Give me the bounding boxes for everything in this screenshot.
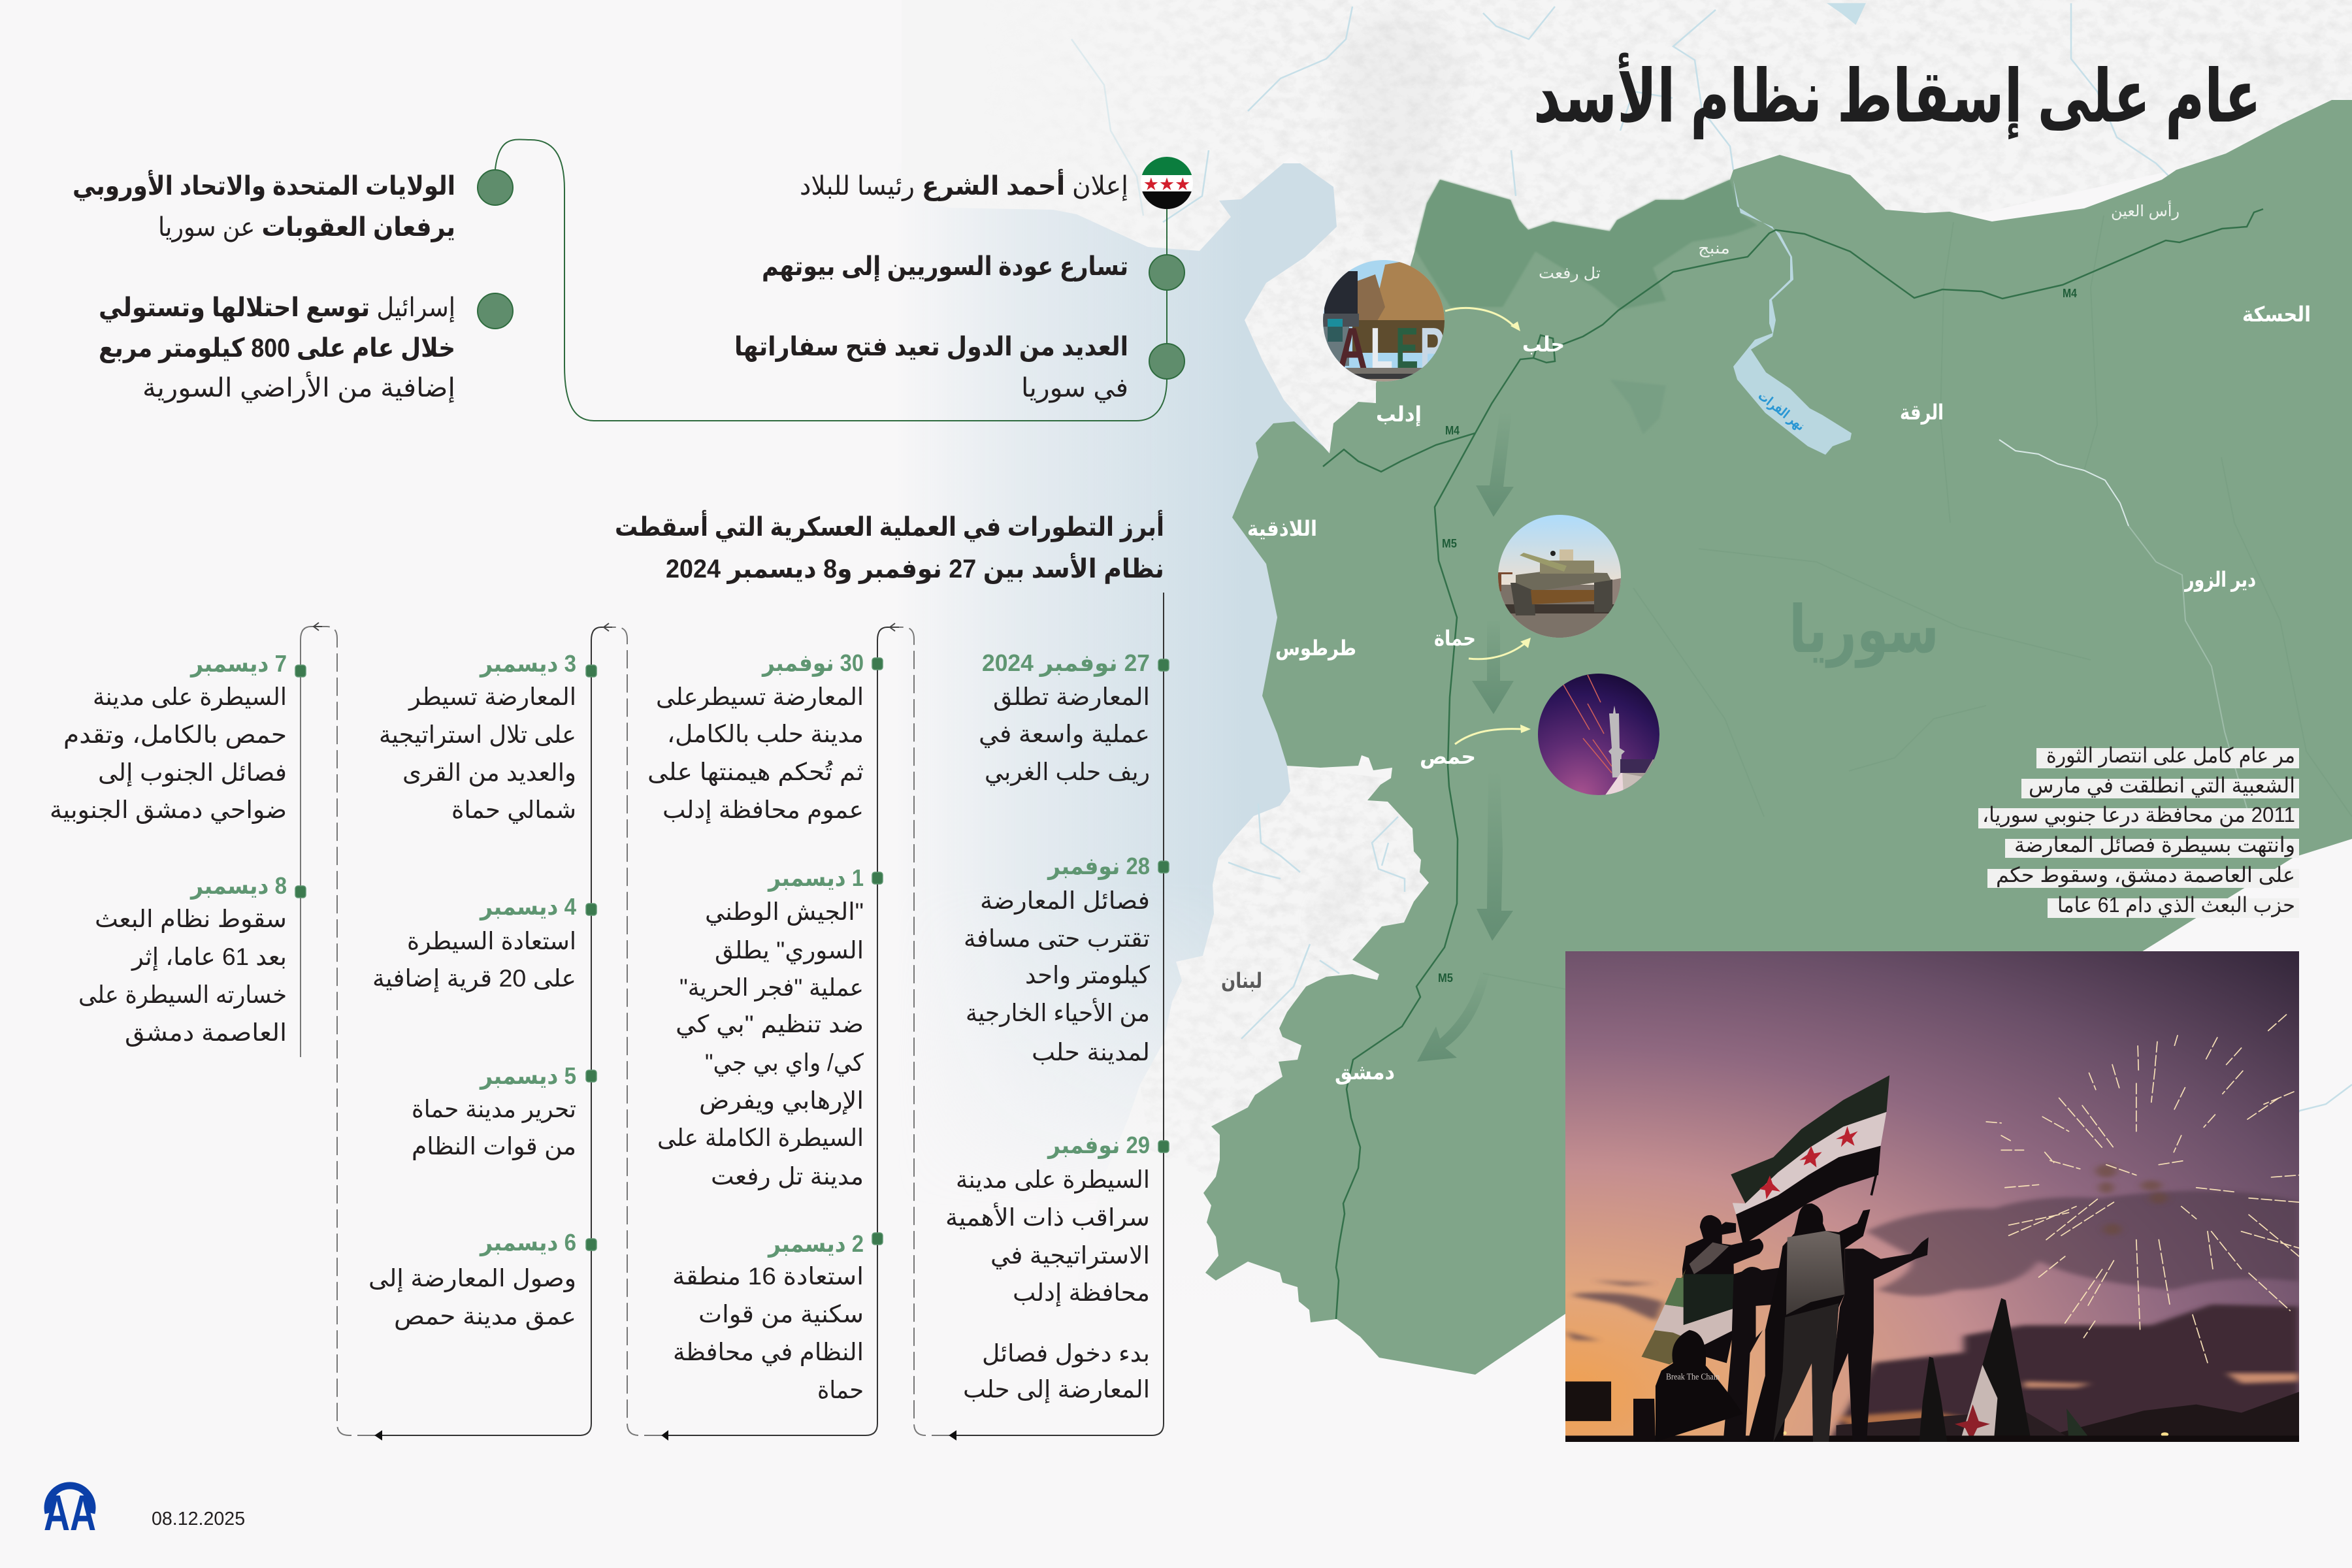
date 29 Nov: 29 نوفمبر: [1047, 1132, 1150, 1159]
entry 29 Nov: محافظة إدلب: [1013, 1279, 1150, 1307]
photo circle: Aleppo sign: E: [1396, 316, 1418, 380]
node 2: [1149, 255, 1184, 290]
entry 7 Dec: ضواحي دمشق الجنوبية: [50, 796, 287, 824]
node 5 Dec: [586, 1070, 596, 1082]
entry 30 Nov: عموم محافظة إدلب: [662, 796, 864, 824]
M4 west: M4: [1445, 424, 1460, 437]
entry 1 Dec: عملية "فجر الحرية": [679, 974, 864, 1002]
entry 30 Nov: [647, 683, 864, 824]
node 6 Dec: [586, 1239, 596, 1250]
summary lines: الشعبية التي انطلقت في مارس: [2029, 774, 2295, 798]
entry 2 Dec: استعادة 16 منطقة: [672, 1263, 864, 1290]
entry 4 Dec: [372, 928, 576, 992]
entry 29 Nov: سراقب ذات الأهمية: [945, 1202, 1150, 1232]
arrow Aleppo: [1445, 308, 1520, 331]
label: Deir ez-Zor: دير الزور: [2183, 568, 2256, 592]
lower river: [1999, 440, 2247, 810]
entry 3 Dec: شمالي حماة: [451, 796, 576, 824]
entry 4 Dec: على 20 قرية إضافية: [372, 965, 576, 992]
label: Tartus: طرطوس: [1275, 636, 1356, 661]
date 4 Dec: 4 ديسمبر: [479, 893, 576, 921]
entry 1 Dec: مدينة تل رفعت: [711, 1163, 864, 1190]
entry 3 Dec: والعديد من القرى: [402, 759, 576, 787]
logo letters: AA: [44, 1485, 96, 1541]
date 6 Dec: 6 ديسمبر: [479, 1229, 576, 1256]
node 30 Nov: [872, 658, 883, 670]
photo circle: tank: [1498, 515, 1621, 638]
entry 7 Dec: [50, 683, 287, 824]
rail 4 solid: [301, 627, 314, 1057]
node 4 Dec: [586, 904, 596, 915]
rail 1 dashed: [898, 627, 950, 1435]
northern darker zone: [1415, 180, 1757, 310]
timeline column 4: [50, 650, 287, 1047]
summary text block: [1978, 743, 2299, 918]
road labels: [1438, 287, 2077, 985]
entry 28 Nov: فصائل المعارضة: [980, 887, 1150, 915]
person with cape: [1641, 1215, 1763, 1364]
line 1: إسرائيل توسع احتلالها وتستولي: [99, 293, 455, 323]
M4 highway: [1323, 209, 2263, 472]
flag stripes: [1731, 1075, 1889, 1245]
entry 1 Dec: كي/ واي بي جي": [705, 1049, 864, 1077]
label: Aleppo: حلب: [1522, 333, 1565, 356]
heading line 2: نظام الأسد بين 27 نوفمبر و8 ديسمبر 2024: [666, 552, 1164, 584]
photo sky, clouds and fireworks: [1565, 951, 2299, 1442]
node 3: [1149, 344, 1184, 379]
event: sanctions: [73, 169, 455, 242]
entry 1 Dec: السوري" يطلق: [715, 937, 864, 964]
arrows: [314, 623, 899, 631]
logo arc: [48, 1486, 92, 1513]
AA logo: [44, 1485, 96, 1541]
timeline column 2: [647, 649, 864, 1403]
node 2 Dec: [872, 1233, 883, 1245]
event: Israel: [99, 293, 455, 403]
inner faint lines: [1483, 216, 2352, 1163]
entry 8 Dec: بعد 61 عاما، إثر: [131, 943, 287, 971]
entry 5 Dec: تحرير مدينة حماة: [412, 1096, 576, 1123]
line backgrounds: [1978, 748, 2299, 918]
entry 2 Dec: النظام في محافظة: [673, 1339, 864, 1366]
entry 7 Dec: حمص بالكامل، وتقدم: [63, 721, 287, 749]
entry 6 Dec: [368, 1265, 576, 1330]
top timeline connector: [495, 139, 1167, 421]
date 30 Nov: 30 نوفمبر: [761, 649, 864, 677]
line 2: خلال عام على 800 كيلومتر مربع: [99, 334, 455, 363]
summary lines: 2011 من محافظة درعا جنوبي سوريا،: [1982, 803, 2295, 827]
entry 1 Dec: "الجيش الوطني: [705, 898, 864, 926]
entry 5 Dec: [412, 1096, 576, 1160]
line 1: العديد من الدول تعيد فتح سفاراتها: [734, 333, 1128, 362]
photo circle: Aleppo sign: L: [1370, 316, 1393, 380]
advance arrow 1: [1476, 412, 1514, 517]
label: Lebanon: لبنان: [1221, 969, 1262, 992]
entry 1 Dec: السيطرة الكاملة على: [657, 1124, 864, 1152]
entry entering Aleppo: [963, 1340, 1150, 1403]
entry entering Aleppo: المعارضة إلى حلب: [963, 1376, 1150, 1403]
advance arrow 2: [1472, 621, 1514, 714]
entry 4 Dec: استعادة السيطرة: [407, 928, 576, 955]
map of Syria and region: [895, 0, 2352, 1405]
entry 2 Dec: [672, 1263, 864, 1403]
sea: [944, 163, 1337, 1125]
M5 north: M5: [1442, 537, 1457, 550]
label: Manbij: منبج: [1698, 240, 1730, 257]
entry 3 Dec: على تلال استراتيجية: [379, 721, 576, 749]
date 5 Dec: 5 ديسمبر: [479, 1062, 576, 1090]
entry 3 Dec: [379, 683, 576, 824]
foreground person: [1656, 1330, 1743, 1442]
node 1 Dec: [872, 872, 883, 884]
entry 2 Dec: حماة: [817, 1377, 864, 1403]
entry 8 Dec: العاصمة دمشق: [125, 1019, 287, 1047]
entry 2 Dec: سكنية من قوات: [698, 1301, 864, 1328]
rail 2 solid: [662, 627, 890, 1435]
bottom shadows: [1633, 1399, 1656, 1442]
entry 30 Nov: المعارضة تسيطرعلى: [656, 683, 864, 711]
node 28 Nov: [1158, 861, 1169, 873]
entry 6 Dec: عمق مدينة حمص: [394, 1303, 576, 1330]
date 2 Dec: 2 ديسمبر: [767, 1230, 864, 1258]
advance arrow 4: [1417, 972, 1490, 1062]
summary lines: مر عام كامل على انتصار الثورة: [2046, 743, 2295, 768]
node 27 Nov: [1158, 659, 1169, 671]
label: Hama: حماة: [1434, 627, 1476, 650]
entry 29 Nov: السيطرة على مدينة: [956, 1166, 1150, 1194]
label: Idlib: إدلب: [1376, 402, 1422, 427]
label: Latakia: اللاذقية: [1247, 517, 1317, 540]
node 4: [478, 170, 513, 205]
neighbouring land: [961, 0, 2352, 1146]
entry 7 Dec: السيطرة على مدينة: [93, 683, 287, 711]
date 28 Nov: 28 نوفمبر: [1047, 853, 1150, 880]
entry 28 Nov: من الأحياء الخارجية: [966, 998, 1150, 1027]
entry 30 Nov: ثم تُحكم هيمنتها على: [647, 759, 864, 786]
small flag right: [1919, 1357, 1947, 1442]
entry 28 Nov: [964, 887, 1150, 1066]
person with vest: [1748, 1203, 1870, 1442]
label: Tell Rifaat: تل رفعت: [1539, 265, 1601, 282]
event: al-Sharaa: إعلان أحمد الشرع رئيسا للبلاد: [800, 169, 1128, 201]
timeline heading: [615, 510, 1164, 584]
top events panel: [73, 157, 1193, 403]
entry 28 Nov: لمدينة حلب: [1032, 1039, 1150, 1066]
Euphrates river and lake: [1733, 180, 1852, 455]
M4 east: M4: [2063, 287, 2077, 300]
photo crowd silhouettes and flag: [1633, 1075, 1946, 1442]
entry 27 Nov: عملية واسعة في: [979, 721, 1150, 748]
node 7 Dec: [295, 665, 306, 677]
line 2: يرفعان العقوبات عن سوريا: [158, 213, 455, 242]
node 8 Dec: [295, 886, 306, 898]
person behind: [1723, 1267, 1779, 1442]
rivers outside Syria: [1071, 3, 2352, 1143]
entry 1 Dec: [657, 898, 864, 1190]
label: Ras al-Ayn: رأس العين: [2111, 201, 2180, 220]
lights: [1784, 1431, 1787, 1435]
photo circle: Aleppo sign: A: [1337, 316, 1367, 380]
M5 south: M5: [1438, 972, 1453, 985]
entry 29 Nov: [945, 1166, 1150, 1307]
node 3 Dec: [586, 665, 596, 677]
entry 3 Dec: المعارضة تسيطر: [408, 683, 576, 711]
timeline nodes: [295, 658, 1169, 1250]
event: return of Syrians: تسارع عودة السوريين إلى بيوتهم: [762, 252, 1128, 282]
entry 8 Dec: خسارته السيطرة على: [78, 981, 287, 1009]
rail 1 solid: [950, 593, 1164, 1435]
entry 29 Nov: الاستراتيجية في: [990, 1242, 1150, 1269]
yellow callout arrows: [1445, 308, 1531, 744]
entry 5 Dec: من قوات النظام: [412, 1133, 576, 1160]
entry entering Aleppo: بدء دخول فصائل: [982, 1340, 1150, 1367]
line 1: الولايات المتحدة والاتحاد الأوروبي: [73, 169, 455, 201]
cities: [1221, 201, 2311, 1085]
arrow Hama: [1469, 638, 1531, 659]
date 3 Dec: 3 ديسمبر: [479, 650, 576, 678]
entry 8 Dec: سقوط نظام البعث: [95, 906, 287, 933]
date 27 Nov: 27 نوفمبر 2024: [982, 649, 1150, 677]
date 1 Dec: 1 ديسمبر: [767, 864, 864, 892]
entry 27 Nov: المعارضة تطلق: [993, 683, 1150, 711]
entry 28 Nov: تقترب حتى مسافة: [964, 925, 1150, 953]
entry 28 Nov: كيلومتر واحد: [1025, 962, 1150, 989]
line 2: في سوريا: [1021, 374, 1128, 403]
rail 3 solid: [376, 627, 604, 1435]
foreground person: Break The Chain: [1666, 1372, 1720, 1382]
summary lines: [1982, 743, 2295, 917]
summary lines: على العاصمة دمشق، وسقوط حكم: [1996, 863, 2295, 887]
entry 30 Nov: مدينة حلب بالكامل،: [667, 721, 864, 747]
label: Raqqa: الرقة: [1900, 400, 1944, 425]
rail 2 dashed: [612, 627, 662, 1435]
photo circle: Aleppo sign: P: [1420, 316, 1445, 380]
entry 1 Dec: ضد تنظيم "بي كي: [676, 1011, 864, 1038]
event: embassies: [734, 333, 1128, 403]
arrow Homs: [1455, 725, 1531, 744]
entry 6 Dec: وصول المعارضة إلى: [368, 1265, 576, 1292]
photo circle: Aleppo sign: [1323, 260, 1445, 383]
label: Homs: حمص: [1420, 745, 1476, 769]
entry 27 Nov: ريف حلب الغربي: [985, 759, 1150, 786]
Syria territory: [1203, 100, 2352, 1375]
rail 3 dashed: [321, 627, 376, 1435]
salt lake patch: [1610, 380, 1666, 434]
line 3: إضافية من الأراضي السورية: [142, 371, 455, 403]
M5 highway: [1336, 433, 1475, 1319]
entry 7 Dec: فصائل الجنوب إلى: [98, 759, 287, 787]
main photo: crowd with flag and fireworks: [1565, 951, 2299, 1442]
label: Syria: سوريا: [1789, 593, 1939, 668]
date 7 Dec: 7 ديسمبر: [189, 650, 287, 678]
advance arrow 3: [1477, 771, 1513, 941]
summary lines: وانتهت بسيطرة فصائل المعارضة: [2014, 833, 2295, 857]
summary lines: حزب البعث الذي دام 61 عاما: [2057, 893, 2295, 917]
date 8 Dec: 8 ديسمبر: [189, 872, 287, 900]
timeline column 3: [368, 650, 576, 1330]
label: Euphrates river: نهر الفرات: [1756, 389, 1807, 434]
icon: Syrian flag: ★★★: [1143, 174, 1190, 195]
timeline column 1: [945, 649, 1150, 1403]
label: Damascus: دمشق: [1335, 1060, 1395, 1085]
date: 08.12.2025: [152, 1509, 245, 1529]
node 5: [478, 293, 513, 329]
entry 27 Nov: [979, 683, 1150, 786]
label: Hasakah: الحسكة: [2242, 302, 2311, 326]
node 29 Nov: [1158, 1141, 1169, 1152]
photo circle: Homs minaret: [1538, 674, 1659, 795]
person with raised arm: [1832, 1237, 1929, 1442]
icon: Syrian flag: [1141, 157, 1193, 210]
entry 1 Dec: الإرهابي ويفرض: [699, 1087, 864, 1115]
timeline rails: [301, 593, 1164, 1439]
entry 8 Dec: [78, 906, 287, 1047]
heading line 1: أبرز التطورات في العملية العسكرية التي أسقطت: [615, 510, 1164, 542]
